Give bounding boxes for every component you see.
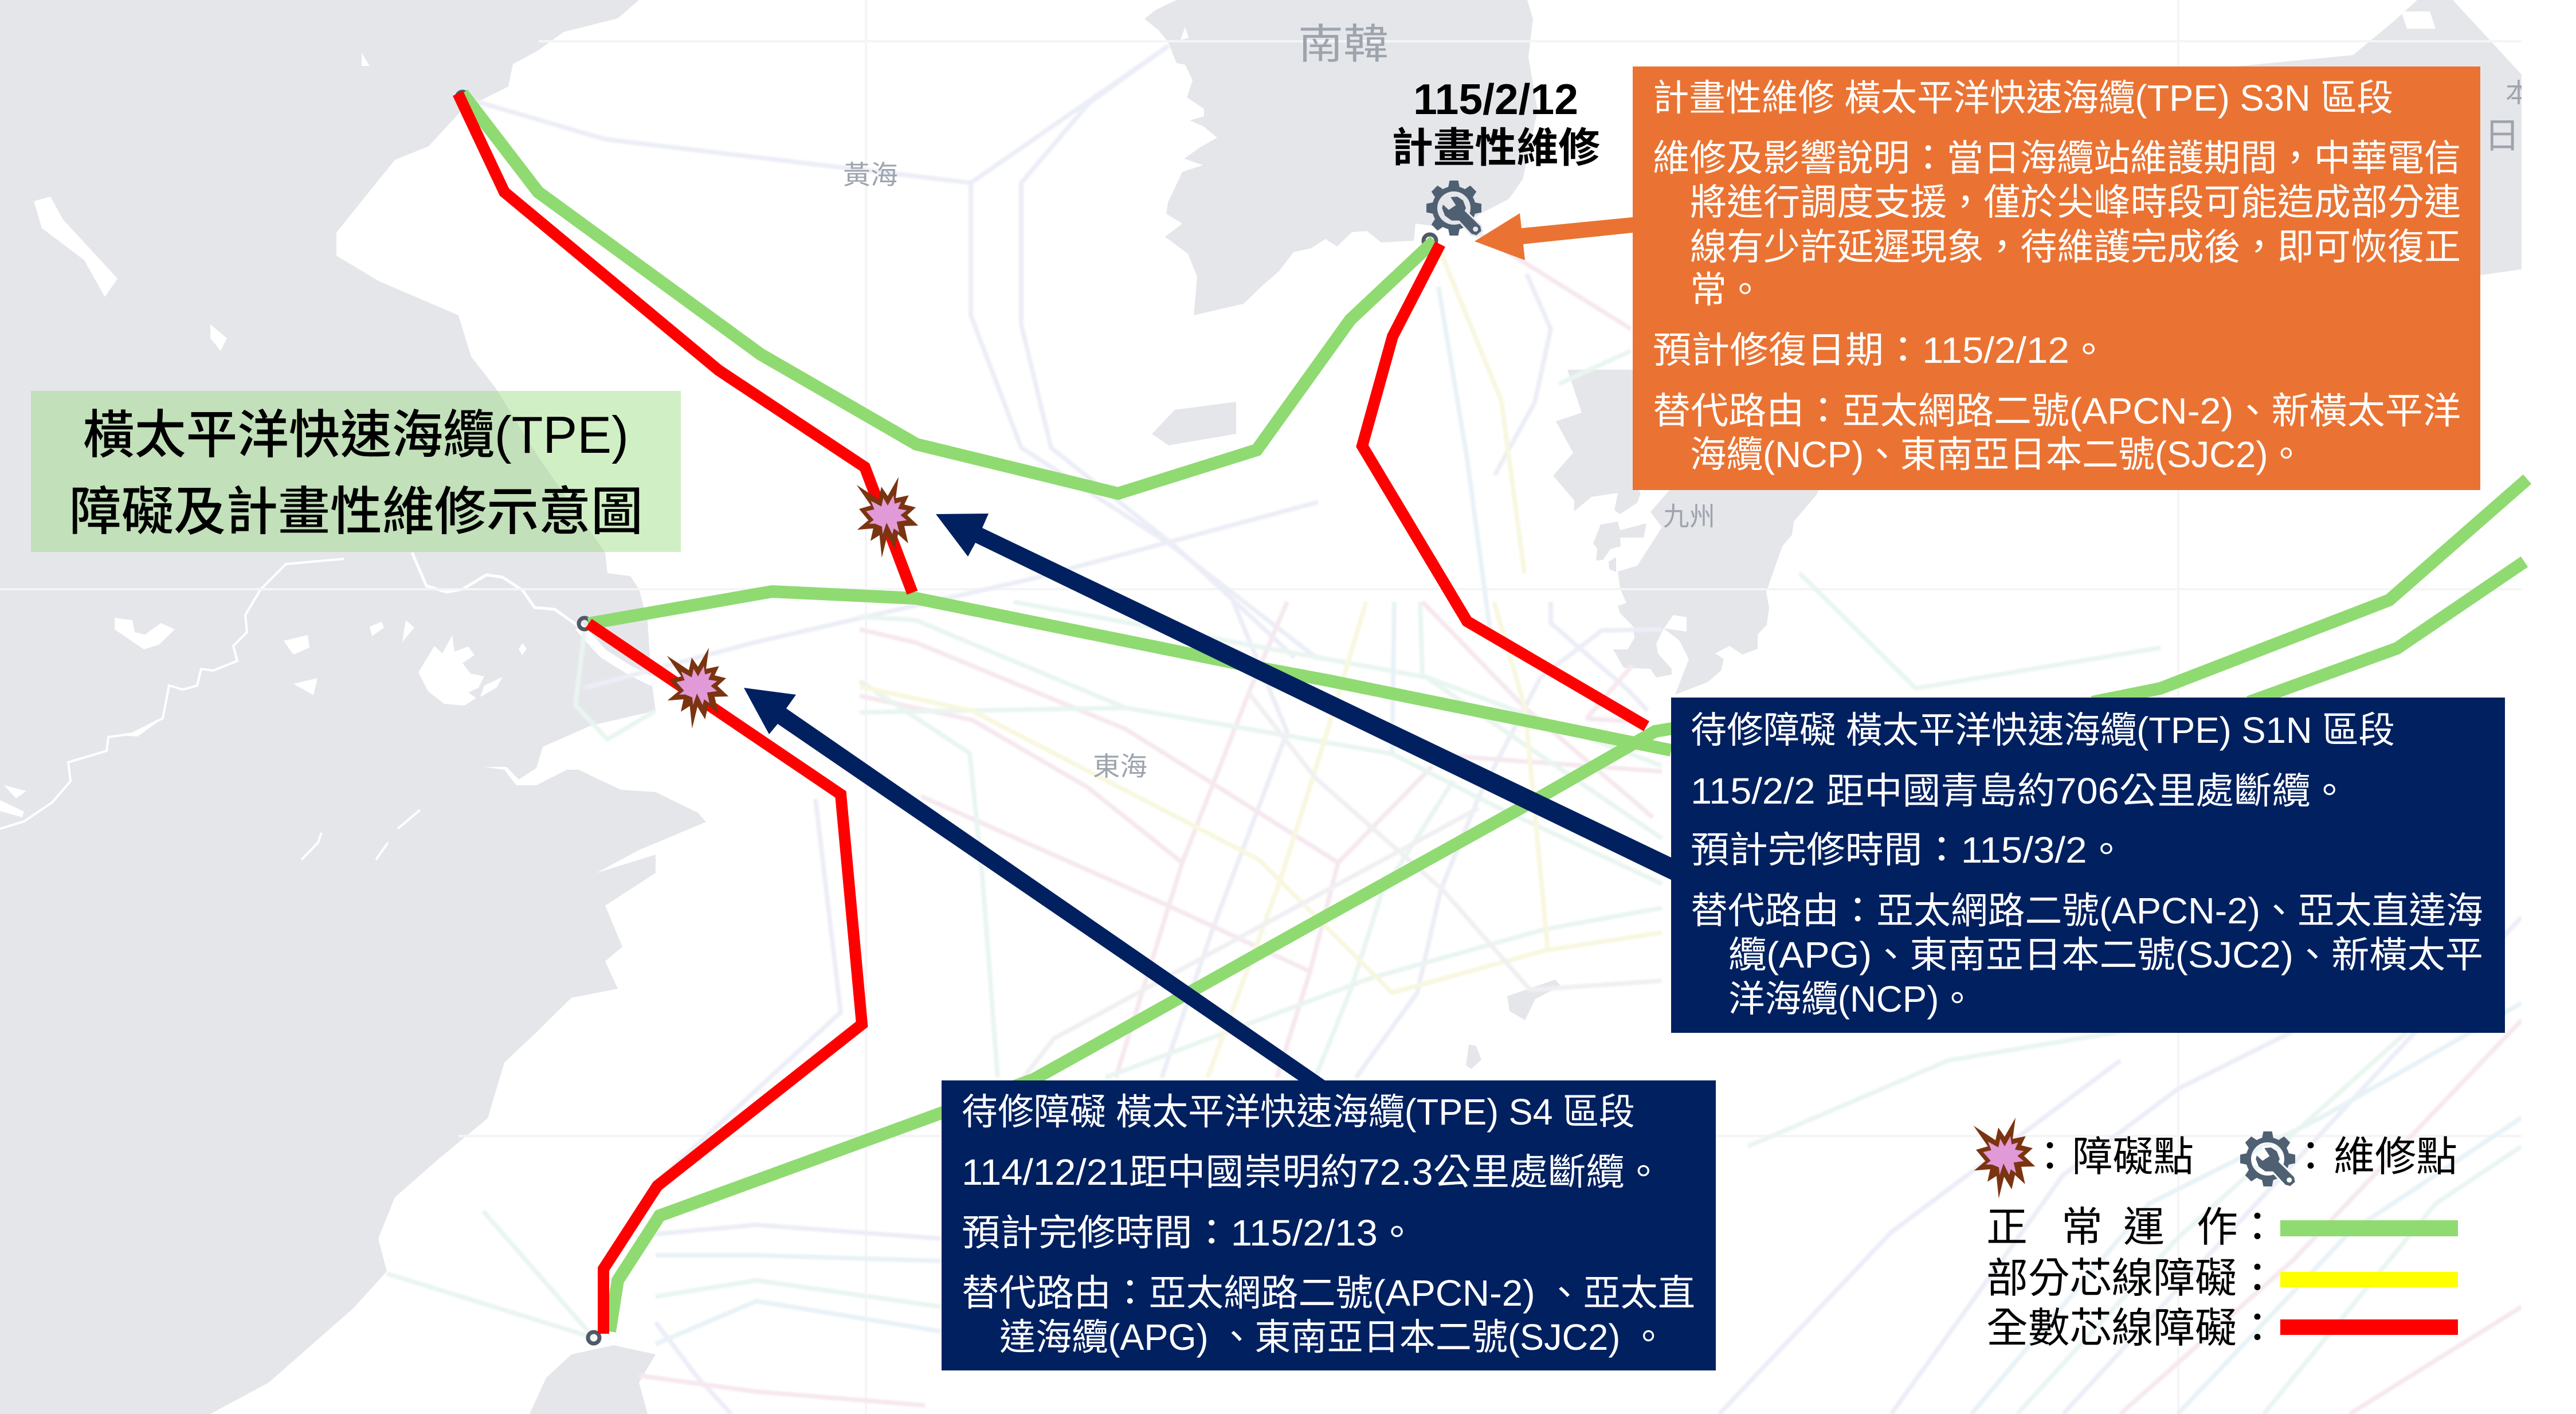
impact description: 將進行調度支援，僅於尖峰時段可能造成部分連 bbox=[1690, 182, 2461, 223]
date: 115/2/12 bbox=[1413, 75, 1578, 123]
fault marker: S1N bbox=[857, 477, 918, 558]
alternate routes bbox=[1691, 890, 2483, 1020]
legend row: normal operation: 作 bbox=[2197, 1205, 2238, 1251]
land: Taiwan bbox=[530, 1345, 656, 1414]
cables: normal operation (green) bbox=[462, 93, 2527, 1331]
title line 1: 橫太平洋快速海纜(TPE) bbox=[83, 406, 629, 464]
cables: all fibres fault (red) bbox=[458, 93, 1646, 1334]
land: Korea bbox=[1144, 0, 1538, 315]
legend row: normal operation: ： bbox=[2237, 1205, 2278, 1251]
legend row: partial fibre fault: ： bbox=[2237, 1256, 2278, 1302]
heading: 待修障礙 橫太平洋快速海纜(TPE) S4 區段 bbox=[962, 1091, 1635, 1133]
cable: eastward upper bbox=[2092, 479, 2527, 702]
title panel bbox=[31, 391, 681, 552]
arrow: S4 callout to fault bbox=[744, 688, 1325, 1080]
arrow: S1N callout to fault bbox=[936, 514, 1671, 880]
heading: 待修障礙 橫太平洋快速海纜(TPE) S1N 區段 bbox=[1691, 710, 2395, 751]
landing station markers bbox=[457, 92, 1436, 1344]
panel: S1N fault bbox=[1671, 698, 2505, 1033]
label: East China Sea: 東海 bbox=[1093, 751, 1147, 781]
impact description: 維修及影響說明：當日海纜站維護期間，中華電信 bbox=[1653, 138, 2461, 179]
legend row: normal operation: 正 bbox=[1986, 1205, 2028, 1251]
legend row: normal operation bbox=[1986, 1205, 2458, 1251]
label: Kyushu: 九州 bbox=[1663, 502, 1715, 531]
impact description: 線有少許延遲現象，待維護完成後，即可恢復正 bbox=[1690, 226, 2461, 268]
repair date: 預計完修時間：115/2/13。 bbox=[962, 1212, 1416, 1254]
legend label: maintenance colon: ： bbox=[2290, 1134, 2331, 1180]
fault description: 114/12/21距中國崇明約72.3公里處斷纜。 bbox=[962, 1151, 1663, 1193]
legend row: partial fibre fault bbox=[1986, 1256, 2458, 1302]
label: Japan second character: 本 bbox=[2506, 78, 2532, 108]
legend label text: fault point: 障礙點 bbox=[2072, 1134, 2194, 1180]
icon: maintenance gear at S3N bbox=[1426, 181, 1481, 236]
maintenance caption: 計畫性維修 bbox=[1391, 126, 1600, 171]
panel: S4 fault bbox=[942, 1080, 1716, 1370]
arrow: S3N callout to maintenance point bbox=[1475, 213, 1633, 260]
label: South Korea: 南韓 bbox=[1298, 22, 1389, 68]
alternate routes: 替代路由：亞太網路二號(APCN-2)、亞太直達海 bbox=[1691, 890, 2483, 931]
cable: Qingdao to Chikura segment bbox=[462, 93, 1434, 493]
cable: S3N Okinawa side bbox=[1362, 244, 1646, 726]
alternate routes: 達海纜(APG) 、東南亞日本二號(SJC2) 。 bbox=[999, 1317, 1667, 1358]
legend row: partial fibre fault: 部分芯線障礙 bbox=[1986, 1256, 2237, 1302]
alternate routes: 洋海纜(NCP)。 bbox=[1728, 978, 1975, 1020]
cable: Shanghai eastward bbox=[589, 592, 1671, 750]
heading: 計畫性維修 橫太平洋快速海纜(TPE) S3N 區段 bbox=[1653, 77, 2393, 119]
legend row: all fibres fault: 全數芯線障礙 bbox=[1986, 1306, 2237, 1352]
legend bbox=[1974, 1118, 2458, 1352]
label: Yellow Sea: 黃海 bbox=[843, 160, 898, 190]
label: Japan: 日 bbox=[2484, 116, 2520, 156]
legend row: normal operation: 運 bbox=[2123, 1205, 2165, 1251]
map labels bbox=[843, 22, 2520, 781]
panel: S3N planned maintenance bbox=[1633, 66, 2480, 490]
cable: Toucheng north-east bbox=[610, 727, 1679, 1331]
land: Japan north-west peninsula bbox=[1553, 370, 1641, 514]
alternate routes: 海纜(NCP)、東南亞日本二號(SJC2)。 bbox=[1690, 434, 2304, 475]
legend row: all fibres fault: ： bbox=[2237, 1306, 2278, 1352]
maintenance date label bbox=[1391, 75, 1600, 171]
legend label text: maintenance point: 維修點 bbox=[2334, 1134, 2457, 1180]
alternate routes: 替代路由：亞太網路二號(APCN-2)、新橫太平洋 bbox=[1653, 390, 2461, 432]
impact description bbox=[1653, 138, 2461, 311]
cable: eastward lower bbox=[2249, 562, 2524, 702]
repair date: 預計修復日期：115/2/12。 bbox=[1653, 330, 2108, 371]
map: inland water and river details bbox=[0, 11, 2436, 860]
legend row: all fibres fault bbox=[1986, 1306, 2458, 1352]
legend row: normal operation: 常 bbox=[2061, 1205, 2103, 1251]
impact description: 常。 bbox=[1690, 269, 1763, 311]
land: Japan main bbox=[1613, 0, 2522, 695]
alternate routes bbox=[1653, 390, 2461, 475]
white strip at right of map bbox=[2522, 0, 2576, 1414]
land: Jeju bbox=[1152, 402, 1236, 445]
alternate routes bbox=[962, 1272, 1695, 1358]
legend icon: maintenance point bbox=[2240, 1131, 2295, 1186]
fault marker: S4 bbox=[667, 648, 728, 728]
repair date: 預計完修時間：115/3/2。 bbox=[1691, 829, 2126, 871]
fault description: 115/2/2 距中國青島約706公里處斷纜。 bbox=[1691, 770, 2348, 812]
land: China coast bbox=[0, 0, 706, 1414]
alternate routes: 纜(APG)、東南亞日本二號(SJC2)、新橫太平 bbox=[1728, 934, 2483, 976]
cable: Qingdao S1N bbox=[458, 93, 912, 593]
cable: Shanghai S4 bbox=[589, 624, 862, 1334]
alternate routes: 替代路由：亞太網路二號(APCN-2) 、亞太直 bbox=[962, 1272, 1695, 1314]
land: Japan islands bbox=[1593, 522, 1646, 561]
title line 2: 障礙及計畫性維修示意圖 bbox=[69, 483, 643, 541]
legend icon: fault point bbox=[1974, 1118, 2035, 1198]
land: Ryukyu islets bbox=[1507, 980, 1561, 1020]
legend label: fault point: ： bbox=[2029, 1134, 2071, 1180]
